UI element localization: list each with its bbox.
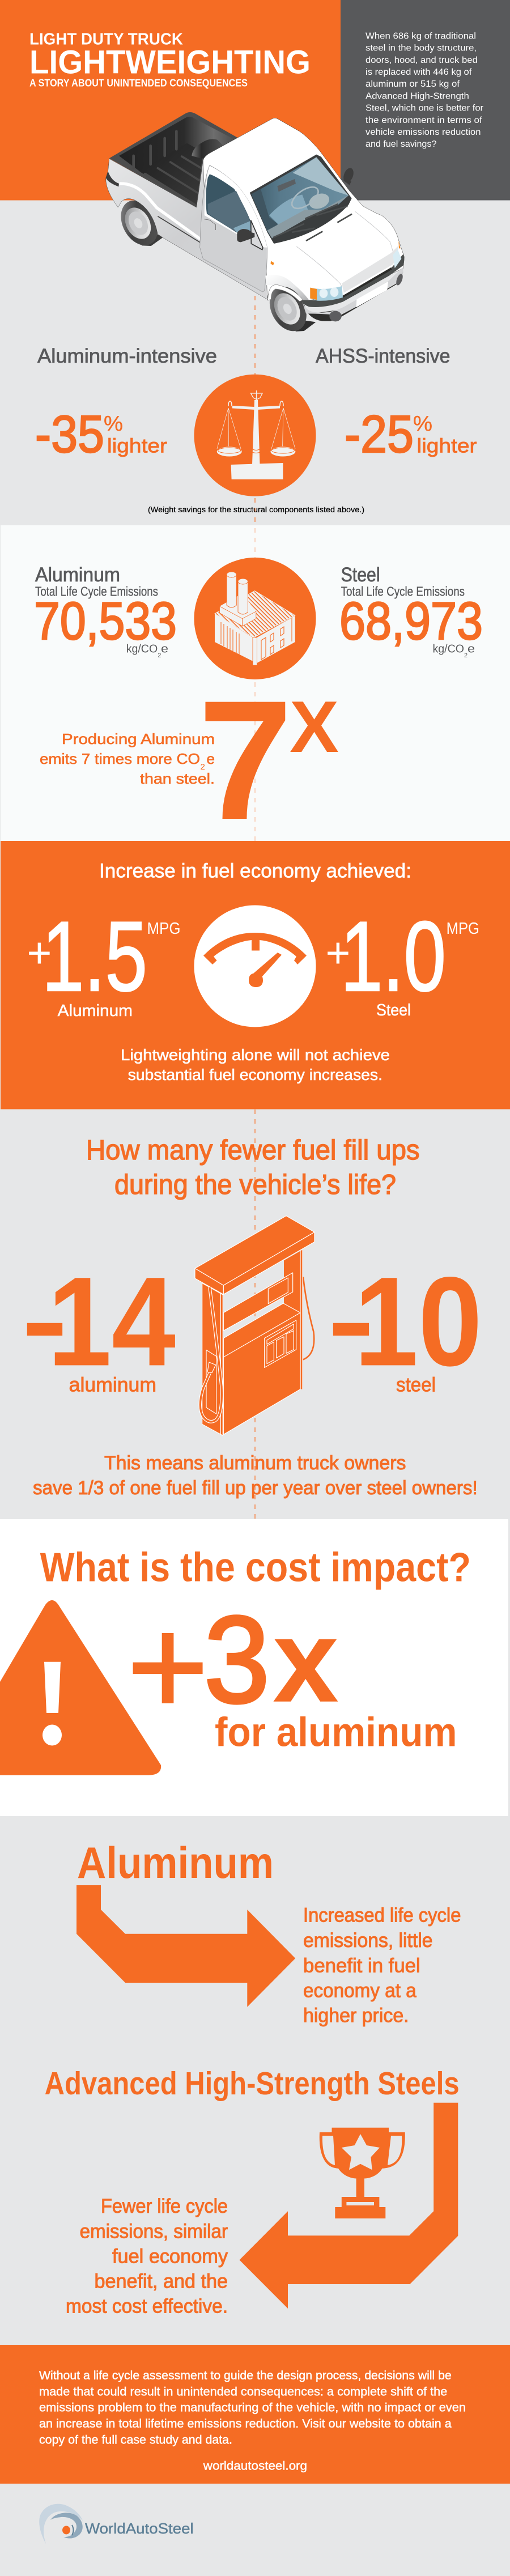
text: aluminum conclusion: emissions, little	[303, 1929, 433, 1952]
panel: header orange	[0, 0, 341, 201]
vent window	[251, 220, 263, 250]
text: producing aluminum: e	[206, 750, 215, 767]
text: this means: This means aluminum truck owners	[104, 1452, 406, 1474]
stat: steel fill ups: 10	[354, 1251, 482, 1392]
intro paragraph: is replaced with 446 kg of	[366, 67, 472, 77]
intro paragraph: the environment in terms of	[366, 116, 482, 125]
heading: cost impact: What is the cost impact?	[40, 1545, 471, 1591]
block: steel emissions	[339, 564, 483, 659]
stat: steel mpg: Steel	[376, 1001, 411, 1019]
intro paragraph: aluminum or 515 kg of	[366, 79, 460, 89]
intro paragraph: doors, hood, and truck bed	[366, 56, 478, 65]
side window	[206, 174, 251, 233]
dashed connector line	[254, 286, 256, 1519]
license plate	[356, 282, 388, 307]
intro paragraph: steel in the body structure,	[366, 44, 477, 53]
stat: steel weight: %	[413, 412, 432, 436]
block: aluminum emissions: 70,533	[34, 591, 177, 651]
stat: steel fill ups: –	[331, 1249, 371, 1391]
stat: aluminum mpg: Aluminum	[58, 1002, 133, 1020]
text: steel conclusion: Fewer life cycle	[101, 2195, 228, 2217]
text: website: worldautosteel.org	[203, 2459, 307, 2472]
front wheel	[262, 280, 316, 338]
icon: warning triangle	[0, 1600, 161, 1775]
text: lightweighting alone	[121, 1046, 390, 1083]
panel: header grey	[341, 0, 510, 201]
windshield	[250, 155, 352, 244]
arrow: aluminum	[76, 1885, 295, 2007]
title line 2: LIGHTWEIGHTING	[29, 44, 311, 80]
stat: steel mpg: MPG	[447, 920, 479, 938]
front wheel arch	[268, 284, 303, 301]
rear wheel	[113, 194, 165, 252]
text: producing aluminum: emits 7 times more CO	[40, 750, 200, 767]
stat: aluminum weight: %	[104, 412, 123, 436]
stat: 7x	[198, 665, 339, 855]
text: aluminum conclusion: higher price.	[303, 2004, 409, 2026]
hood crease	[296, 211, 393, 288]
text: this means: save 1/3 of one fuel fill up per year over steel owners!	[33, 1477, 478, 1499]
title line 1: LIGHT DUTY TRUCK	[29, 31, 183, 49]
text: producing aluminum: Producing Aluminum	[62, 730, 215, 747]
title block	[29, 31, 311, 88]
front end	[262, 241, 404, 338]
panel: emissions	[1, 525, 510, 841]
stat: aluminum weight	[35, 405, 167, 464]
stat: 7x: 7	[198, 665, 292, 855]
hood shading	[342, 245, 398, 293]
text: lightweighting alone: substantial fuel economy increases.	[128, 1066, 382, 1083]
text: aluminum conclusion: Increased life cycle	[303, 1905, 461, 1927]
heading: fuel economy: Increase in fuel economy achieved:	[99, 860, 411, 882]
near side mirror	[237, 229, 254, 242]
stat: steel mpg: 1.0	[341, 902, 446, 1012]
block: steel emissions: 2	[464, 652, 468, 659]
heading: fuel fill ups: during the vehicle’s life?	[114, 1170, 396, 1200]
block: aluminum emissions: e	[161, 643, 168, 656]
stat: 7x: X	[290, 686, 339, 768]
block: aluminum emissions: kg/CO	[126, 643, 158, 656]
stat: aluminum fill ups: –	[25, 1249, 65, 1391]
text: conclusion paragraph: copy of the full case study and data.	[39, 2433, 232, 2446]
text: producing aluminum: 2	[201, 762, 205, 772]
stat: aluminum weight: lighter	[107, 435, 167, 457]
text: steel conclusion: fuel economy	[112, 2245, 228, 2267]
stat: +3x: 3	[204, 1591, 270, 1729]
intro paragraph: vehicle emissions reduction	[366, 127, 481, 137]
text: producing aluminum	[40, 730, 215, 787]
stat: steel mpg: +	[325, 929, 350, 976]
stat: aluminum mpg: MPG	[147, 920, 180, 938]
block: aluminum emissions: Total Life Cycle Emissions	[35, 584, 158, 599]
logo: WorldAutoSteel: WorldAutoSteel	[85, 2520, 194, 2537]
arrow: steel	[239, 2103, 458, 2309]
text: aluminum conclusion	[303, 1905, 461, 2026]
stat: aluminum fill ups: aluminum	[69, 1374, 156, 1396]
icon: factory in circle	[194, 558, 316, 679]
block: aluminum emissions	[34, 564, 177, 659]
truck bed	[109, 112, 238, 208]
icon: pickup truck illustration	[106, 112, 404, 338]
text: steel conclusion: emissions, similar	[80, 2220, 228, 2242]
text: this means	[33, 1452, 478, 1499]
intro paragraph: and fuel savings?	[366, 139, 437, 149]
stat: +3x: +	[127, 1588, 209, 1745]
far mirror	[342, 167, 355, 185]
heading: aluminum-intensive: Aluminum-intensive	[37, 345, 217, 367]
bumper mid panel	[302, 267, 403, 316]
bumper top band	[301, 254, 404, 307]
text: for aluminum: for aluminum	[215, 1710, 457, 1755]
headlight	[310, 286, 343, 301]
intro paragraph: Steel, which one is better for	[366, 104, 484, 113]
far headlight	[393, 241, 401, 268]
text: conclusion paragraph	[39, 2369, 466, 2446]
text: steel conclusion: benefit, and the	[94, 2270, 228, 2292]
hood vents	[306, 214, 352, 241]
stat: steel fill ups: steel	[396, 1374, 436, 1396]
intro paragraph	[366, 32, 484, 149]
intro paragraph: When 686 kg of traditional	[366, 32, 476, 41]
stat: aluminum fill ups: 14	[48, 1251, 176, 1392]
side body	[106, 159, 268, 300]
icon: fuel pump	[195, 1216, 314, 1435]
panel: conclusion	[0, 2345, 510, 2484]
text: steel conclusion: most cost effective.	[66, 2296, 228, 2318]
cab roof and hood	[203, 118, 404, 300]
door top white strip	[205, 166, 267, 248]
stat: steel weight: lighter	[417, 435, 477, 457]
icon: balance scale in circle	[194, 375, 316, 496]
stat: aluminum mpg: 1.5	[42, 902, 147, 1012]
heading: fuel fill ups: How many fewer fuel fill ups	[86, 1135, 419, 1166]
heading: fuel fill ups	[86, 1135, 419, 1200]
stat: steel weight: -25	[345, 405, 414, 464]
fog lights	[329, 273, 404, 321]
stat: steel weight	[345, 405, 477, 464]
door handle	[204, 219, 216, 230]
intro paragraph: Advanced High-Strength	[366, 91, 469, 101]
text: steel conclusion	[66, 2195, 228, 2318]
block: aluminum emissions: 2	[158, 652, 161, 659]
panel: cost impact	[0, 1519, 508, 1816]
block: steel emissions: kg/CO	[433, 643, 464, 656]
panel: fuel economy	[1, 841, 510, 1110]
text: lightweighting alone: Lightweighting alone will not achieve	[121, 1046, 390, 1064]
door	[200, 165, 267, 292]
rear bumper corner	[106, 172, 119, 186]
text: aluminum conclusion: economy at a	[303, 1979, 416, 2001]
logo: WorldAutoSteel	[39, 2504, 194, 2544]
subtitle: A STORY ABOUT UNINTENDED CONSEQUENCES	[29, 77, 248, 88]
heading: ahss-intensive: AHSS-intensive	[316, 345, 450, 367]
block: steel emissions: Steel	[341, 564, 380, 586]
text: conclusion paragraph: an increase in total lifetime emissions reduction. Visit our website to obtain a	[39, 2417, 452, 2430]
block: steel emissions: Total Life Cycle Emissions	[341, 584, 465, 599]
stat: +3x	[127, 1588, 339, 1745]
block: aluminum emissions: Aluminum	[35, 564, 120, 586]
text: producing aluminum: than steel.	[140, 770, 215, 787]
front fender	[265, 275, 310, 301]
stat: aluminum weight: -35	[35, 405, 104, 464]
text: conclusion paragraph: Without a life cycle assessment to guide the design process, decisions will be	[39, 2369, 452, 2382]
side marker	[270, 261, 274, 265]
fender highlight and body moulding	[120, 184, 265, 279]
icon: trophy	[320, 2128, 405, 2218]
text: conclusion paragraph: emissions problem to the manufacturing of the vehicle, with no impact or even	[39, 2401, 466, 2415]
note: weight savings: (Weight savings for the structural components listed above.)	[148, 505, 364, 514]
icon: gauge in circle	[194, 906, 316, 1027]
text: conclusion paragraph: made that could result in unintended consequences: a complete shift of the	[39, 2384, 447, 2398]
stat: aluminum mpg: +	[27, 929, 52, 976]
text: aluminum conclusion: benefit in fuel	[303, 1954, 420, 1976]
block: steel emissions: 68,973	[339, 591, 483, 651]
lower bumper	[305, 272, 403, 321]
heading: aluminum: Aluminum	[77, 1838, 274, 1888]
stat: +3x: x	[273, 1596, 339, 1727]
block: steel emissions: e	[468, 643, 475, 656]
grille strip	[343, 267, 392, 297]
